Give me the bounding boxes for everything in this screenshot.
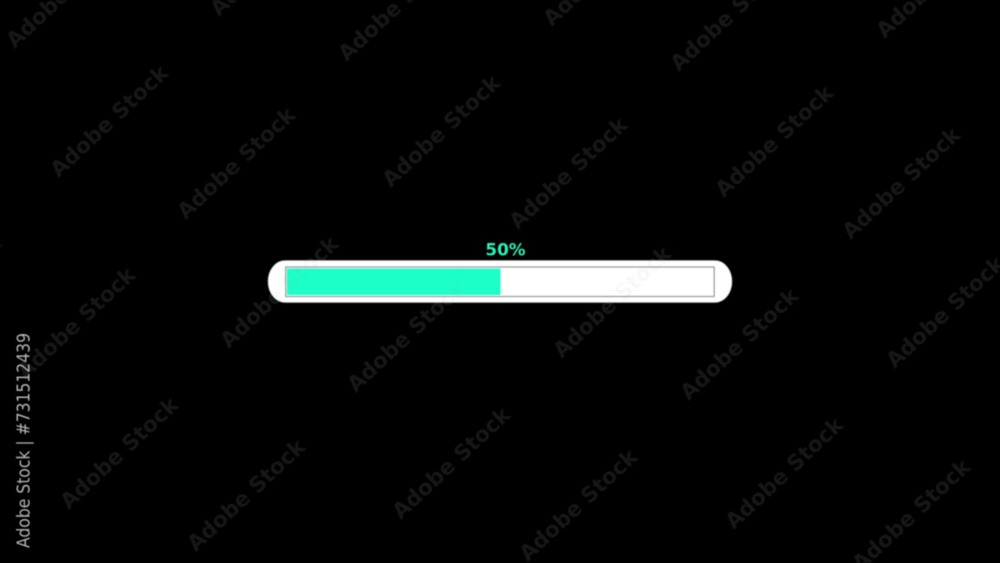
watermark pattern: Adobe Stock: [838, 122, 966, 245]
watermark pattern: Adobe Stock: [721, 412, 849, 535]
watermark pattern: Adobe Stock: [173, 102, 301, 225]
faint watermark over bar: Adobe Stock: [549, 241, 677, 364]
watermark pattern: Adobe Stock: [505, 112, 633, 235]
percentage label: 50%: [485, 240, 526, 260]
bar inner track: [286, 267, 714, 296]
watermark pattern: Adobe Stock: [13, 262, 141, 385]
watermark pattern: Adobe Stock: [676, 283, 804, 406]
watermark pattern: Adobe Stock: [378, 70, 506, 193]
progress bar: [267, 260, 733, 304]
watermark pattern: Adobe Stock: [388, 402, 516, 525]
watermark pattern: Adobe Stock: [183, 434, 311, 557]
stock id side label: Adobe Stock | #731512439: [14, 333, 34, 548]
bar fill at 50%: [287, 268, 500, 295]
watermark pattern: Adobe Stock: [56, 392, 184, 515]
watermark pattern: Adobe Stock: [343, 275, 471, 398]
faint watermark over bar: [216, 231, 677, 398]
watermark pattern: Adobe Stock: [711, 80, 839, 203]
faint watermark over bar: Adobe Stock: [343, 275, 471, 398]
watermark pattern: Adobe Stock: [46, 60, 174, 183]
watermark pattern: Adobe Stock: [216, 231, 344, 354]
faint watermark over bar: Adobe Stock: [216, 231, 344, 354]
watermark pattern: Adobe Stock: [549, 241, 677, 364]
watermark pattern: Adobe Stock: [515, 444, 643, 563]
bar outer white capsule: [268, 260, 732, 302]
